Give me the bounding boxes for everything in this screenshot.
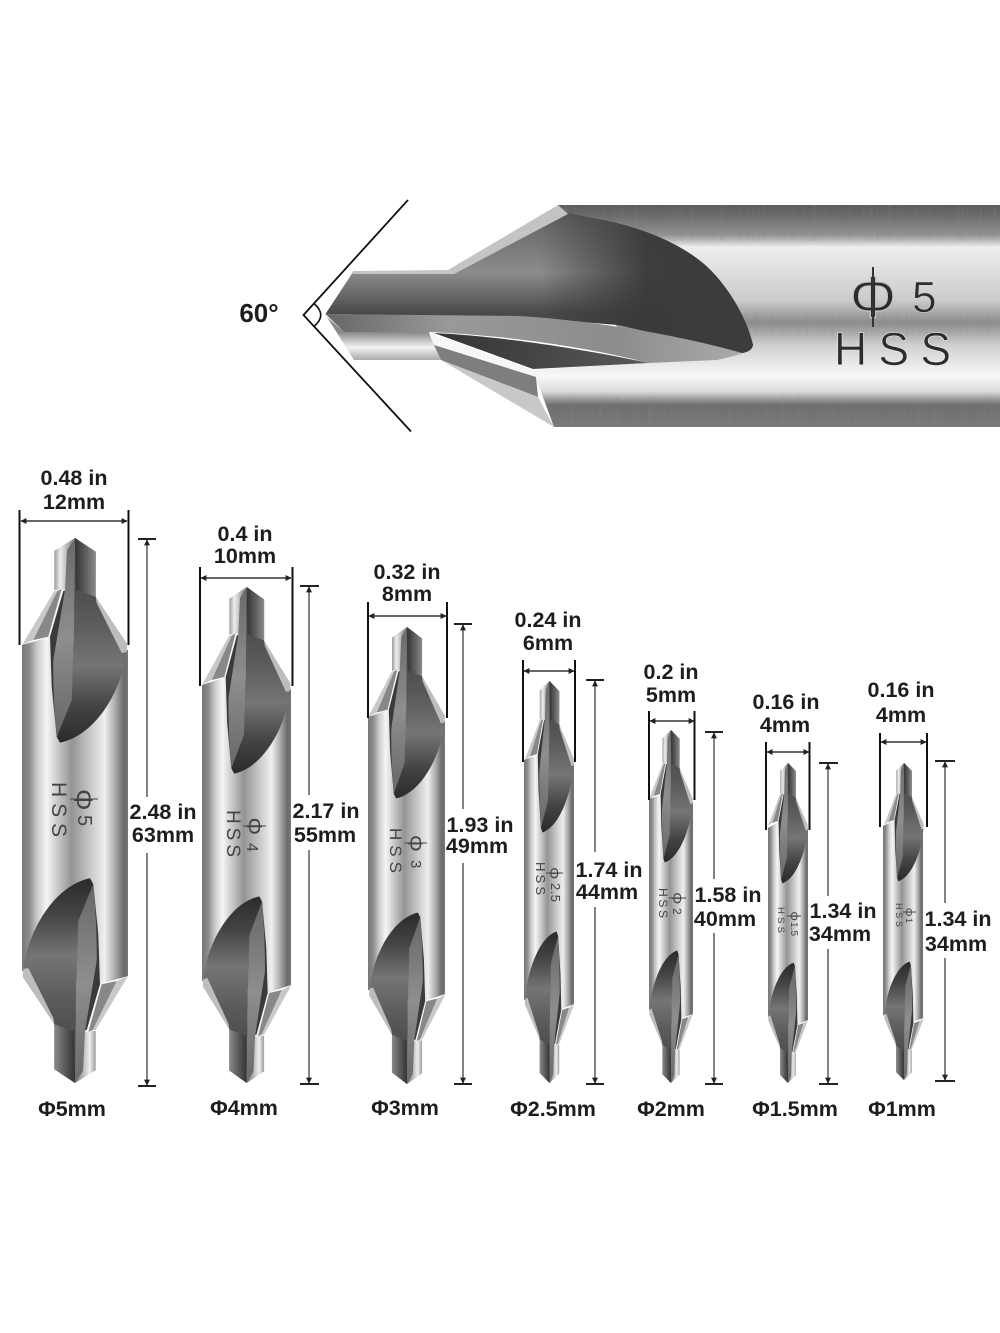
- marking: diameter 5: [850, 265, 936, 330]
- drill: 5mm: [22, 538, 128, 1083]
- height dimension: 5mm drill: [130, 539, 196, 1086]
- marking: [894, 903, 916, 927]
- body: [368, 710, 445, 1001]
- height dimension: 5mm drill: 63mm: [132, 823, 194, 847]
- marking: Φ: [545, 867, 562, 879]
- marking: [533, 862, 563, 902]
- height dimension: 1.5mm drill: 1.34 in: [810, 899, 876, 923]
- bottom head: [884, 962, 924, 1080]
- marking: diameter 5: Φ: [850, 265, 896, 330]
- height dimension: 4mm drill: 55mm: [294, 823, 356, 847]
- size label: 1mm: Φ1mm: [868, 1097, 936, 1121]
- height dimension: 4mm drill: 2.17 in: [293, 799, 359, 823]
- drill: 3mm: [368, 627, 445, 1084]
- height dimension: 2mm drill: 40mm: [694, 907, 756, 931]
- width dimension: 3mm drill: 8mm: [382, 582, 432, 606]
- marking: Φ: [68, 789, 98, 811]
- size label: 4mm: Φ4mm: [210, 1096, 278, 1120]
- height dimension: 2.5mm drill: [576, 680, 642, 1084]
- height dimension: 5mm drill: 2.48 in: [130, 800, 196, 824]
- height dimension: 1.5mm drill: [809, 763, 876, 1084]
- size label: 2.5mm: Φ2.5mm: [510, 1097, 596, 1121]
- width dimension: 2.5mm drill: 6mm: [523, 631, 573, 655]
- top head: [202, 587, 291, 774]
- height dimension: 2.5mm drill: 44mm: [576, 880, 638, 904]
- drill: 1.5mm: [768, 763, 808, 1083]
- lower cone facet: [434, 345, 538, 397]
- marking: HSS: HSS: [834, 323, 951, 375]
- width dimension: 2.5mm drill: [515, 608, 581, 762]
- body: [883, 821, 923, 1022]
- marking: Φ: [403, 835, 426, 852]
- bottom head: [768, 963, 808, 1083]
- marking: Φ: [787, 911, 801, 921]
- marking: Φ: [242, 818, 266, 835]
- body: [22, 637, 128, 984]
- width dimension: 5mm drill: 0.48 in: [41, 466, 107, 490]
- marking: [386, 828, 427, 873]
- width dimension: 1.5mm drill: 4mm: [760, 713, 810, 737]
- angle arc: [314, 304, 321, 326]
- width dimension: 4mm drill: 0.4 in: [218, 522, 272, 546]
- lower cone highlight: [441, 360, 554, 427]
- height dimension: 2mm drill: [694, 732, 761, 1084]
- flute: [326, 213, 753, 353]
- height dimension: 3mm drill: 1.93 in: [447, 813, 513, 837]
- top head: [525, 681, 574, 832]
- marking: 1.5: [788, 922, 799, 936]
- height dimension: 2.5mm drill: 1.74 in: [576, 858, 642, 882]
- bottom head: [369, 912, 445, 1084]
- height dimension: 3mm drill: 49mm: [446, 834, 508, 858]
- marking: HSS: [222, 810, 243, 857]
- top head: [768, 763, 808, 883]
- marking: [775, 907, 801, 936]
- bottom head: [649, 951, 693, 1083]
- width dimension: 4mm drill: [200, 522, 292, 686]
- lower pilot: [327, 317, 441, 360]
- bottom head: [203, 896, 291, 1083]
- body: [649, 795, 693, 1018]
- width dimension: 3mm drill: 0.32 in: [374, 560, 440, 584]
- marking: 3: [407, 860, 424, 868]
- marking: HSS: [386, 828, 405, 873]
- marking: Φ: [902, 908, 914, 917]
- bottom head: [525, 932, 574, 1083]
- marking: Φ: [668, 892, 685, 904]
- width dimension: 3mm drill: [368, 560, 447, 718]
- drill: 2mm: [649, 730, 693, 1083]
- top head: [649, 730, 693, 862]
- cone highlight: [353, 205, 568, 274]
- brushed metal streaks: [566, 205, 996, 397]
- white edge: [429, 333, 536, 377]
- width dimension: 2mm drill: [644, 660, 698, 800]
- angle lines: [304, 200, 411, 432]
- marking: [222, 810, 266, 857]
- height dimension: 1mm drill: [925, 761, 991, 1081]
- height dimension: 1mm drill: 34mm: [925, 932, 987, 956]
- height dimension: 4mm drill: [293, 586, 359, 1084]
- width dimension: 2mm drill: 0.2 in: [644, 660, 698, 684]
- marking: diameter 5: 5: [912, 273, 936, 322]
- width dimension: 1.5mm drill: [753, 690, 819, 830]
- top head: [22, 538, 127, 743]
- marking: 2: [670, 908, 684, 915]
- width dimension: 1mm drill: 4mm: [876, 703, 926, 727]
- top head: [369, 627, 445, 799]
- marking: HSS: [894, 903, 904, 927]
- marking: HSS: [47, 782, 70, 837]
- flute shading: [540, 213, 753, 353]
- drill: 4mm: [202, 587, 291, 1083]
- marking: 1: [904, 918, 914, 923]
- height dimension: 1.5mm drill: 34mm: [809, 922, 871, 946]
- top head: [884, 763, 924, 881]
- drill: 1mm: [883, 763, 924, 1080]
- height dimension: 2mm drill: 1.58 in: [695, 883, 761, 907]
- panel: close-up of the 60 degree drill tip: [239, 200, 1000, 432]
- size label: 3mm: Φ3mm: [371, 1096, 439, 1120]
- width dimension: 5mm drill: 12mm: [43, 490, 105, 514]
- dark wedge: [434, 333, 648, 369]
- size label: 5mm: Φ5mm: [38, 1097, 106, 1121]
- height dimension: 3mm drill: [446, 624, 513, 1084]
- size label: 1.5mm: Φ1.5mm: [752, 1097, 838, 1121]
- marking: HSS: [775, 907, 786, 933]
- cutting blade: [326, 314, 742, 363]
- width dimension: 4mm drill: 10mm: [214, 544, 276, 568]
- drill close-up body: [533, 205, 1000, 427]
- angle label: 60°: [239, 298, 279, 328]
- marking: HSS: [533, 862, 548, 895]
- width dimension: 5mm drill: [20, 466, 128, 645]
- height dimension: 1mm drill: 1.34 in: [925, 907, 991, 931]
- marking: 4: [243, 843, 260, 852]
- marking: HSS: [656, 888, 670, 918]
- size label: 2mm: Φ2mm: [637, 1097, 705, 1121]
- width dimension: 2mm drill: 5mm: [646, 683, 696, 707]
- width dimension: 1mm drill: [868, 678, 934, 827]
- width dimension: 1.5mm drill: 0.16 in: [753, 690, 819, 714]
- width dimension: 1mm drill: 0.16 in: [868, 678, 934, 702]
- marking: 2.5: [548, 883, 563, 902]
- marking: 5: [73, 815, 95, 826]
- drill: 2.5mm: [524, 681, 574, 1083]
- body: [202, 677, 291, 993]
- body: [524, 755, 574, 1009]
- marking: [47, 782, 98, 837]
- marking: [656, 888, 686, 918]
- body: [768, 822, 808, 1024]
- bottom head: [23, 878, 128, 1083]
- width dimension: 2.5mm drill: 0.24 in: [515, 608, 581, 632]
